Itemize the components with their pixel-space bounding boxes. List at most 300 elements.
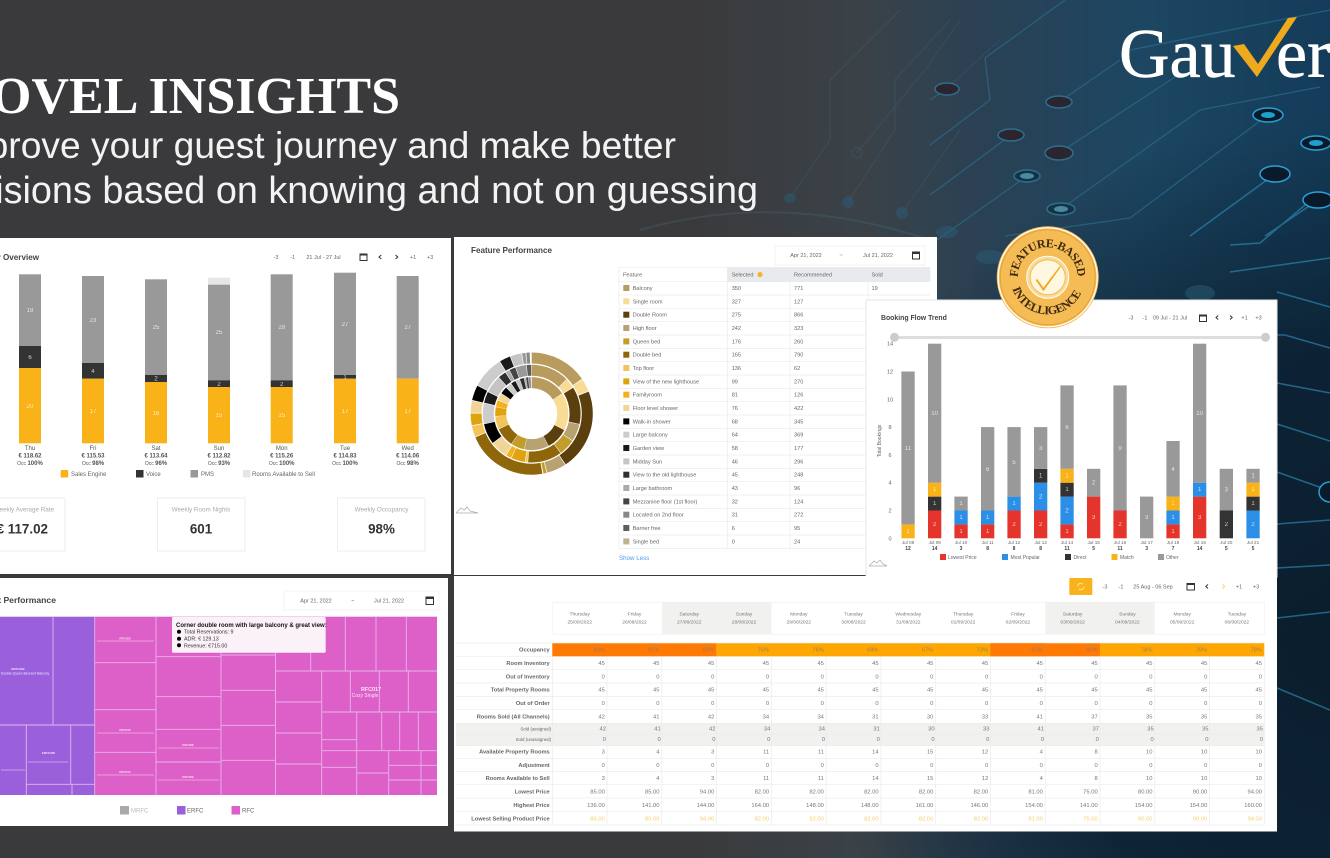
link: show less: Show Less (619, 555, 649, 562)
bar: Jul 13: 2 (1039, 494, 1043, 500)
treemap: room types by revenue: ERFC002 (11, 667, 25, 671)
KPI card: weekly average rate (0, 498, 65, 551)
table values: 11 (818, 750, 824, 756)
table values: 45 (708, 688, 714, 694)
table column headers: dates: Monday (1173, 612, 1191, 618)
bar: Sun: 2 (217, 382, 221, 388)
table values: 80.00 (1138, 789, 1152, 795)
table: feature selected, recommended, sold: 270 (794, 379, 803, 385)
table: feature selected, recommended, sold: 790 (794, 353, 803, 359)
table values: 148.00 (806, 803, 824, 809)
bar: Jul 12 (1007, 427, 1021, 538)
tooltip: corner double room: Total Reservations: 9 (184, 630, 234, 636)
lowest selling product price row: 82.00 (864, 816, 879, 822)
x-axis labels: day, rate, occupancy: Occ 96% (145, 461, 168, 467)
tooltip: corner double room: Corner double room with large balcony & great view: (176, 623, 327, 629)
table values: 45 (1146, 688, 1152, 694)
table column headers: dates: Tuesday (844, 612, 863, 618)
bar: Jul 17 (1140, 497, 1153, 538)
row labels: Total Property Rooms (491, 688, 550, 694)
table values: 161.00 (916, 803, 933, 809)
table: feature selected, recommended, sold: 136 (732, 366, 741, 372)
table values: 82.00 (864, 789, 879, 795)
bar: Jul 21: 1 (1251, 487, 1255, 493)
panel: booking flow trend (866, 300, 1277, 577)
date controls: +1 (1241, 316, 1248, 322)
table values: 0 (602, 701, 605, 707)
table: feature selected, recommended, sold: 81 (732, 393, 738, 399)
x-axis labels: day, rate, occupancy: Tue (340, 446, 351, 452)
table values: 0 (877, 737, 880, 743)
table: feature selected, recommended, sold: Walk-in shower (633, 419, 671, 425)
occupancy heat row: 93% (593, 648, 605, 654)
bar: Jul 18: 4 (1171, 467, 1175, 473)
table values: 10 (1201, 750, 1207, 756)
tooltip: corner double room: ADR: € 129.13 (184, 637, 219, 643)
x-axis labels: dates and totals: 11 (1064, 546, 1070, 552)
x-axis labels: dates and totals: 5 (1092, 546, 1095, 552)
occupancy heat row: 78% (1196, 648, 1207, 654)
y axis: total bookings: 6 (888, 453, 892, 459)
row labels: Adjustment (518, 763, 550, 769)
table values: 42 (709, 727, 716, 733)
table values: 81.00 (1028, 789, 1043, 795)
legend: channels: Voice (146, 472, 161, 478)
row labels: Lowest Price (515, 789, 550, 795)
date controls: -3 (274, 255, 278, 261)
date range control: ~ (839, 253, 843, 259)
date range control: Apr 21, 2022 (790, 253, 822, 259)
bar: Thu: 6 (28, 355, 32, 361)
table: feature selected, recommended, sold: Single room (633, 299, 663, 305)
table values: 45 (763, 688, 769, 694)
KPI card: weekly occupancy: 98% (368, 522, 395, 536)
badge text: INTELLIGENCE (1012, 286, 1081, 314)
bar: Jul 18 (1166, 441, 1180, 538)
bar: Jul 16: 9 (1118, 446, 1122, 452)
table values: 0 (1094, 701, 1098, 707)
table values: 0 (930, 701, 933, 707)
table column headers: dates: Thursday (570, 612, 590, 618)
bar: Jul 14: 2 (1065, 508, 1069, 514)
table values: 45 (1091, 688, 1098, 694)
bar: Jul 19: 3 (1198, 515, 1202, 521)
occupancy heat row: 76% (812, 648, 824, 654)
bar: Jul 18: 1 (1171, 529, 1175, 535)
table values: 0 (767, 737, 770, 743)
bar: Jul 21: 1 (1251, 501, 1255, 507)
x-axis labels: dates and totals: Jul 15 (1088, 540, 1100, 545)
y axis: total bookings: 12 (887, 370, 893, 376)
table values: 0 (1149, 763, 1152, 769)
lowest selling product price row: 80.00 (1138, 816, 1152, 822)
date controls: +1 (410, 255, 416, 261)
table: feature selected, recommended, sold: 242 (732, 326, 741, 332)
x-axis labels: day, rate, occupancy: Occ 100% (332, 461, 358, 467)
table: feature selected, recommended, sold: Garden view (633, 446, 665, 452)
row labels: Sold (unassigned) (516, 737, 552, 742)
table: feature selected, recommended, sold: 124 (794, 499, 803, 505)
table values: 45 (598, 688, 605, 694)
x-axis labels: dates and totals: Jul 16 (1114, 540, 1127, 545)
x-axis labels: day, rate, occupancy: Mon (276, 446, 288, 452)
bar: Jul 18: 1 (1171, 515, 1175, 521)
bar: Jul 09: 2 (933, 522, 937, 528)
bar: Jul 19 (1193, 344, 1206, 538)
lowest selling product price row: 82.00 (974, 816, 988, 822)
table values: 0 (985, 701, 988, 707)
table values: 146.00 (970, 803, 988, 809)
table column headers: dates: 29/08/2022 (787, 620, 811, 626)
table values: 45 (1091, 661, 1098, 667)
logo: Gauver (1119, 16, 1330, 93)
table: feature selected, recommended, sold: Queen bed (633, 339, 660, 345)
table values: 0 (986, 737, 989, 743)
treemap label: RFC017: Cozy Single (352, 693, 379, 699)
table: feature selected, recommended, sold: 327 (732, 299, 741, 305)
table: feature selected, recommended, sold: Floor level shower (633, 406, 678, 412)
table values: 141.00 (1080, 803, 1098, 809)
table: feature selected, recommended, sold: 58 (732, 446, 738, 452)
row labels: Rooms Sold (All Channels) (477, 714, 550, 720)
occupancy heat row: 78% (1141, 648, 1152, 654)
table values: 37 (1091, 714, 1098, 720)
row labels: Out of Inventory (506, 674, 551, 680)
table: feature selected, recommended, sold: 248 (794, 473, 803, 479)
y axis: total bookings: Total Bookings (877, 424, 883, 457)
icon: checkmark (1036, 266, 1061, 291)
table values: 45 (817, 688, 824, 694)
x-axis labels: day, rate, occupancy: Occ 100% (269, 461, 295, 467)
panel title: Feature Performance (471, 246, 552, 255)
table values: 41 (653, 714, 660, 720)
date controls (1103, 583, 1259, 590)
x-axis labels: day, rate, occupancy: € 114.06 (396, 454, 420, 460)
KPI card: weekly occupancy: Weekly Occupancy (355, 506, 409, 514)
table: feature selected, recommended, sold: 866 (794, 313, 803, 319)
bar: Fri: 17 (90, 409, 97, 415)
bar: Jul 12: 2 (1012, 522, 1016, 528)
bar: Sat (145, 279, 167, 443)
table values: 0 (875, 674, 879, 680)
date range control: Jul 21, 2022 (374, 598, 404, 604)
row labels: Rooms Available to Sell (486, 776, 550, 782)
table values: 82.00 (974, 789, 988, 795)
table values: 82.00 (919, 789, 933, 795)
KPI card: weekly room nights: Weekly Room Nights (172, 506, 230, 514)
table values: 35 (1257, 727, 1263, 733)
table values (587, 661, 1263, 809)
lowest selling product price row: 85.00 (645, 816, 660, 822)
table values: 14 (872, 750, 879, 756)
bar: Sun (208, 278, 230, 443)
table values: 37 (1092, 727, 1099, 733)
y axis: total bookings: 0 (888, 536, 892, 542)
lowest selling product price row: 75.00 (1083, 816, 1098, 822)
tooltip: corner double room (172, 617, 327, 653)
table values: 136.00 (587, 803, 605, 809)
row labels: Sold (assigned) (520, 726, 552, 732)
table values: 0 (930, 763, 933, 769)
bar: Jul 11: 1 (986, 515, 990, 521)
table: feature selected, recommended, sold: 345 (794, 419, 803, 425)
bar: Sun: 25 (216, 330, 223, 336)
date controls: 25 Aug - 06 Sep (1133, 584, 1173, 590)
table values: 148.00 (861, 803, 879, 809)
table values: 34 (764, 727, 771, 733)
table: feature selected, recommended, sold: 46 (732, 459, 738, 465)
bar: Jul 19: 1 (1198, 487, 1202, 493)
table column headers: dates: 31/08/2022 (896, 620, 921, 626)
table: feature selected, recommended, sold: 176 (732, 339, 741, 345)
table values: 0 (1040, 763, 1043, 769)
table column headers: dates: Sunday (1119, 612, 1136, 618)
table values: 8 (1094, 750, 1098, 756)
bar: Jul 09: 1 (933, 487, 937, 493)
y axis: total bookings: 8 (888, 425, 892, 431)
treemap: room types by revenue: RFC008 (182, 743, 194, 747)
x-axis labels: dates and totals: Jul 09 (929, 540, 941, 545)
bar: Jul 11: 1 (986, 529, 990, 535)
table: feature selected, recommended, sold: 64 (732, 433, 738, 439)
bar: Sat: 25 (153, 325, 160, 331)
lowest selling product price row: 85.00 (590, 816, 605, 822)
table: feature selected, recommended, sold: 99 (732, 379, 738, 385)
table values: 42 (598, 714, 605, 720)
date controls (1129, 314, 1262, 322)
date range control (284, 591, 439, 610)
table values: 0 (1259, 674, 1262, 680)
tooltip: corner double room: Revenue: €715.00 (184, 643, 227, 649)
table: feature selected, recommended, sold: Barrier free (633, 526, 661, 532)
date controls (274, 254, 433, 261)
bar: Jul 09: 1 (933, 501, 937, 507)
table: feature selected, recommended, sold: 127 (794, 299, 803, 305)
bar: Mon (271, 274, 293, 443)
bar: Sat: 2 (154, 376, 158, 382)
table: feature selected, recommended, sold: 272 (794, 513, 803, 519)
date controls: +3 (427, 255, 433, 261)
table: feature selected, recommended, sold: 422 (794, 406, 803, 412)
bar: Jul 21: 1 (1251, 474, 1255, 480)
table values: 0 (766, 763, 769, 769)
date range control (775, 246, 925, 265)
table values: 35 (1146, 714, 1152, 720)
table values: 45 (653, 661, 660, 667)
lowest selling product price row: 82.00 (755, 816, 769, 822)
x-axis labels: day, rate, occupancy: € 115.53 (81, 454, 105, 460)
table values: 94.00 (700, 789, 714, 795)
table: feature selected, recommended, sold: 96 (794, 486, 800, 492)
table: feature selected, recommended, sold: 369 (794, 433, 803, 439)
watermark: mini mountain logo (869, 560, 887, 566)
table values: 42 (600, 727, 606, 733)
table values: 0 (985, 674, 988, 680)
lowest selling product price row: 82.00 (809, 816, 824, 822)
x-axis labels: day, rate, occupancy: Thu (25, 446, 35, 452)
date controls: 09 Jul - 21 Jul (1153, 316, 1187, 322)
x-axis labels: dates and totals: 3 (960, 546, 963, 552)
table values: 154.00 (1190, 803, 1207, 809)
bar: Jul 17: 3 (1145, 515, 1149, 521)
x-axis labels: dates and totals: Jul 19 (1194, 540, 1206, 545)
row labels: Out of Order (516, 701, 550, 707)
table: feature selected, recommended, sold: 68 (732, 419, 738, 425)
table: feature selected, recommended, sold: 6 (732, 526, 735, 532)
stacked bar chart: daily rooms by channel (19, 273, 419, 443)
x-axis labels: dates and totals: Jul 10 (955, 540, 968, 545)
table values: 141.00 (642, 803, 660, 809)
bar: Jul 21 (1246, 469, 1260, 538)
KPI card: weekly room nights (158, 498, 245, 551)
occupancy heat row: 78% (1250, 648, 1262, 654)
table values: 10 (1146, 776, 1152, 782)
lowest selling product price row: 90.00 (1193, 816, 1207, 822)
bar: Jul 10: 1 (959, 515, 963, 521)
legend: booking reasons: Match (1120, 555, 1134, 561)
table column headers: dates: 04/09/2022 (1115, 620, 1140, 626)
bar: Jul 09 (928, 344, 941, 538)
table values: 45 (1036, 661, 1043, 667)
table: feature selected, recommended, sold: Single bed (633, 539, 659, 545)
table values: 0 (1260, 737, 1263, 743)
table: feature selected, recommended, sold: 771 (794, 286, 803, 292)
bar: Fri: 23 (90, 318, 97, 324)
row labels: Room Inventory (506, 661, 551, 667)
table: feature selected, recommended, sold: 24 (794, 539, 800, 545)
table column headers: dates: Wednesday (895, 612, 922, 618)
watermark: mini mountain logo (456, 507, 478, 513)
table values: 0 (1204, 763, 1207, 769)
table values: 0 (1094, 674, 1098, 680)
x-axis labels: day, rate, occupancy: € 115.26 (270, 454, 294, 460)
treemap: room types by revenue: ERFC005 (42, 751, 55, 755)
table values: 41 (1036, 714, 1043, 720)
table column headers: dates: 03/09/2022 (1060, 620, 1085, 626)
table values: 4 (1040, 750, 1044, 756)
table: feature selected, recommended, sold: Large balcony (633, 433, 668, 439)
x-axis labels: dates and totals: 11 (1117, 546, 1123, 552)
table column headers: dates: Thursday (953, 612, 974, 618)
x-axis labels: dates and totals: Jul 21 (1247, 540, 1260, 545)
x-axis labels: dates and totals: 8 (986, 546, 989, 552)
table: feature selected, recommended, sold: 350 (732, 286, 741, 292)
legend: channels: PMS (201, 472, 214, 478)
table values: 45 (872, 661, 879, 667)
occupancy heat row: 67% (922, 648, 933, 654)
x-axis labels: day, rate, occupancy: € 112.82 (207, 454, 231, 460)
bar: Jul 14: 1 (1065, 487, 1069, 493)
bar: Wed: 27 (404, 325, 412, 331)
table values: 45 (927, 661, 933, 667)
legend: channels (61, 470, 315, 478)
panel: weekly overview (0, 238, 451, 574)
table values: 0 (821, 763, 824, 769)
chart: sunburst donut of features (476, 358, 587, 469)
x-axis labels: dates and totals: Jul 08 (902, 540, 915, 545)
table values: 41 (654, 727, 661, 733)
table values: 45 (653, 688, 660, 694)
table values: 0 (1204, 674, 1207, 680)
table values: 45 (763, 661, 769, 667)
row labels: Occupancy (519, 647, 551, 653)
table values: 0 (1040, 701, 1043, 707)
x-axis labels: day, rate, occupancy: € 118.62 (18, 454, 42, 460)
table values: 0 (1096, 737, 1099, 743)
date controls: +3 (1253, 584, 1259, 590)
bar: Jul 14: 6 (1065, 425, 1069, 431)
table values: 45 (598, 661, 605, 667)
bar: Thu: 19 (27, 308, 34, 314)
table: feature selected, recommended, sold: View of the new lighthouse (633, 379, 699, 385)
table values: 4 (656, 750, 660, 756)
date controls: -1 (1143, 316, 1147, 322)
date range control: Jul 21, 2022 (863, 253, 893, 259)
x-axis labels: day, rate, occupancy: Occ 98% (82, 461, 105, 467)
table column headers: dates: 01/09/2022 (951, 620, 976, 626)
bar: Jul 18: 1 (1171, 501, 1175, 507)
table column headers: dates: 30/08/2022 (841, 620, 866, 626)
table: feature selected, recommended, sold: 275 (732, 313, 741, 319)
table values: 35 (1256, 714, 1262, 720)
panel title: Booking Flow Trend (881, 315, 947, 322)
table values: 4 (1040, 776, 1044, 782)
y axis: total bookings: 4 (888, 481, 892, 487)
row labels: Available Property Rooms (479, 750, 550, 756)
table: feature selected, recommended, sold: Mezzanine floor (1st floor) (633, 499, 698, 505)
table: feature selected, recommended, sold: 260 (794, 339, 803, 345)
treemap: room types by revenue: RFC009 (182, 775, 194, 779)
table: feature selected, recommended, sold: Balcony (633, 286, 653, 292)
bar: Jul 15: 2 (1092, 480, 1096, 486)
bar: Thu: 20 (27, 404, 34, 410)
date controls: -3 (1103, 584, 1107, 590)
table values: 8 (1094, 776, 1098, 782)
table: feature selected, recommended, sold: 76 (732, 406, 738, 412)
table values: 154.00 (1135, 803, 1152, 809)
logo: Gauver: er (1276, 16, 1330, 93)
bar: Mon: 2 (280, 382, 284, 388)
table values: 3 (711, 776, 714, 782)
table: feature selected, recommended, sold: Midday Sun (633, 459, 662, 465)
table values: 0 (875, 701, 879, 707)
table values: 0 (822, 737, 825, 743)
bar: Fri: 4 (91, 369, 95, 375)
bar: Jul 14 (1060, 385, 1074, 538)
table values: 0 (657, 737, 661, 743)
table values: 45 (1256, 688, 1262, 694)
table: feature selected, recommended, sold: 62 (794, 366, 800, 372)
bar: Fri (82, 276, 104, 443)
bar: Sat: 16 (153, 411, 160, 417)
table values: 10 (1256, 776, 1262, 782)
x-axis labels: dates and totals: Jul 20 (1220, 540, 1233, 545)
table values: 12 (982, 776, 988, 782)
table: feature selected, recommended, sold: Feature (623, 272, 642, 278)
table column headers: dates: 25/08/2022 (567, 620, 592, 626)
refresh button (1069, 578, 1092, 595)
table values: 0 (656, 674, 660, 680)
bar: Tue: 17 (342, 409, 349, 415)
table: feature selected, recommended, sold: High floor (633, 326, 657, 332)
badge text (1010, 239, 1086, 314)
table: feature selected, recommended, sold: Top floor (633, 366, 654, 372)
x-axis labels: day, rate, occupancy: € 114.83 (333, 454, 357, 460)
x-axis labels: dates and totals: Jul 14 (1061, 540, 1074, 545)
bar: Sun: 15 (216, 413, 223, 419)
lowest selling product price row: 81.00 (1028, 816, 1043, 822)
table values: 30 (927, 714, 933, 720)
